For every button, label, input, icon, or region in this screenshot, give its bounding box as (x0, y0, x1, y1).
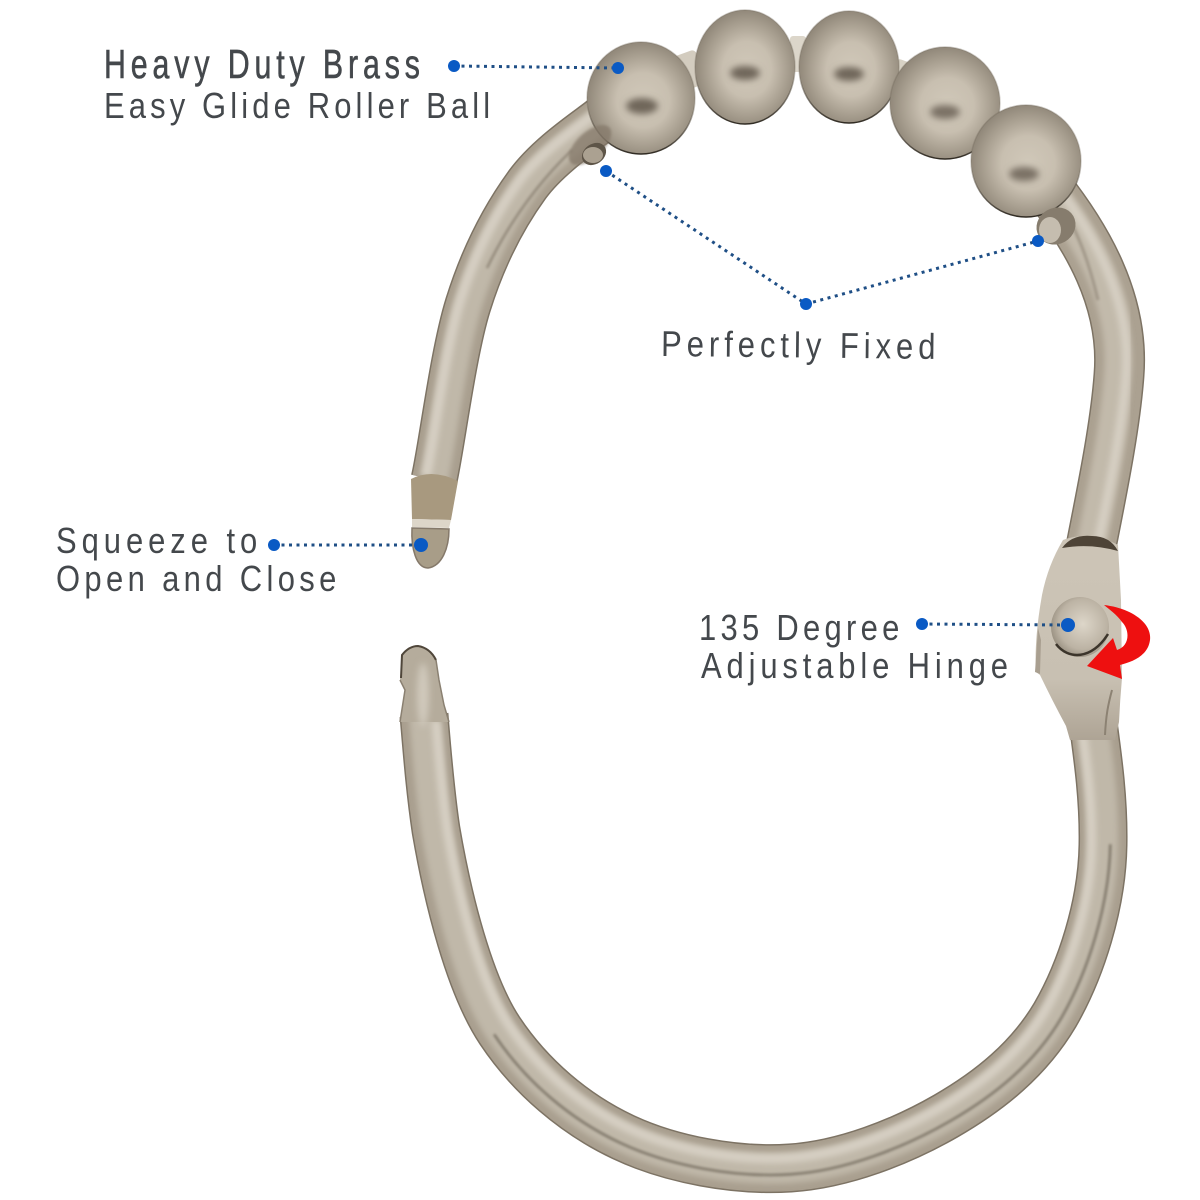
label: adjustable hinge (699, 609, 1008, 687)
roller ball 5 (971, 105, 1081, 217)
rotation arrow (1087, 605, 1150, 679)
leader: squeeze (268, 538, 428, 552)
ring: right upper arm (1048, 184, 1127, 552)
roller ball 1 (587, 42, 695, 154)
label: squeeze to open and close: Squeeze to (56, 522, 257, 562)
label: heavy duty brass: Heavy Duty Brass (104, 40, 420, 87)
ring: lower loop (400, 646, 1110, 1175)
left rivet (562, 118, 618, 172)
label: perfectly fixed: Perfectly Fixed (661, 325, 936, 367)
right rivet (1030, 200, 1082, 252)
label: heavy duty brass: Easy Glide Roller Ball (104, 87, 490, 127)
leader: perfectly fixed (600, 165, 1044, 310)
leader: heavy duty brass (448, 60, 624, 74)
upper left arm end face (411, 474, 458, 528)
leader: hinge (916, 618, 1075, 632)
hinge knob (1051, 597, 1109, 657)
ring: upper left arm (411, 113, 604, 568)
squeeze tip (412, 528, 449, 568)
roller ball 2 (695, 10, 795, 124)
label: adjustable hinge: 135 Degree (699, 609, 899, 649)
roller ball 3 (799, 11, 899, 123)
lower tip (400, 646, 449, 727)
label: adjustable hinge: Adjustable Hinge (701, 647, 1008, 687)
label: squeeze to open and close (56, 522, 336, 600)
roller ball 4 (890, 47, 1000, 159)
hinge plate (1035, 536, 1122, 740)
label: squeeze to open and close: Open and Close (56, 560, 336, 600)
roller pins between balls (673, 36, 1010, 138)
label: heavy duty brass (104, 40, 490, 127)
